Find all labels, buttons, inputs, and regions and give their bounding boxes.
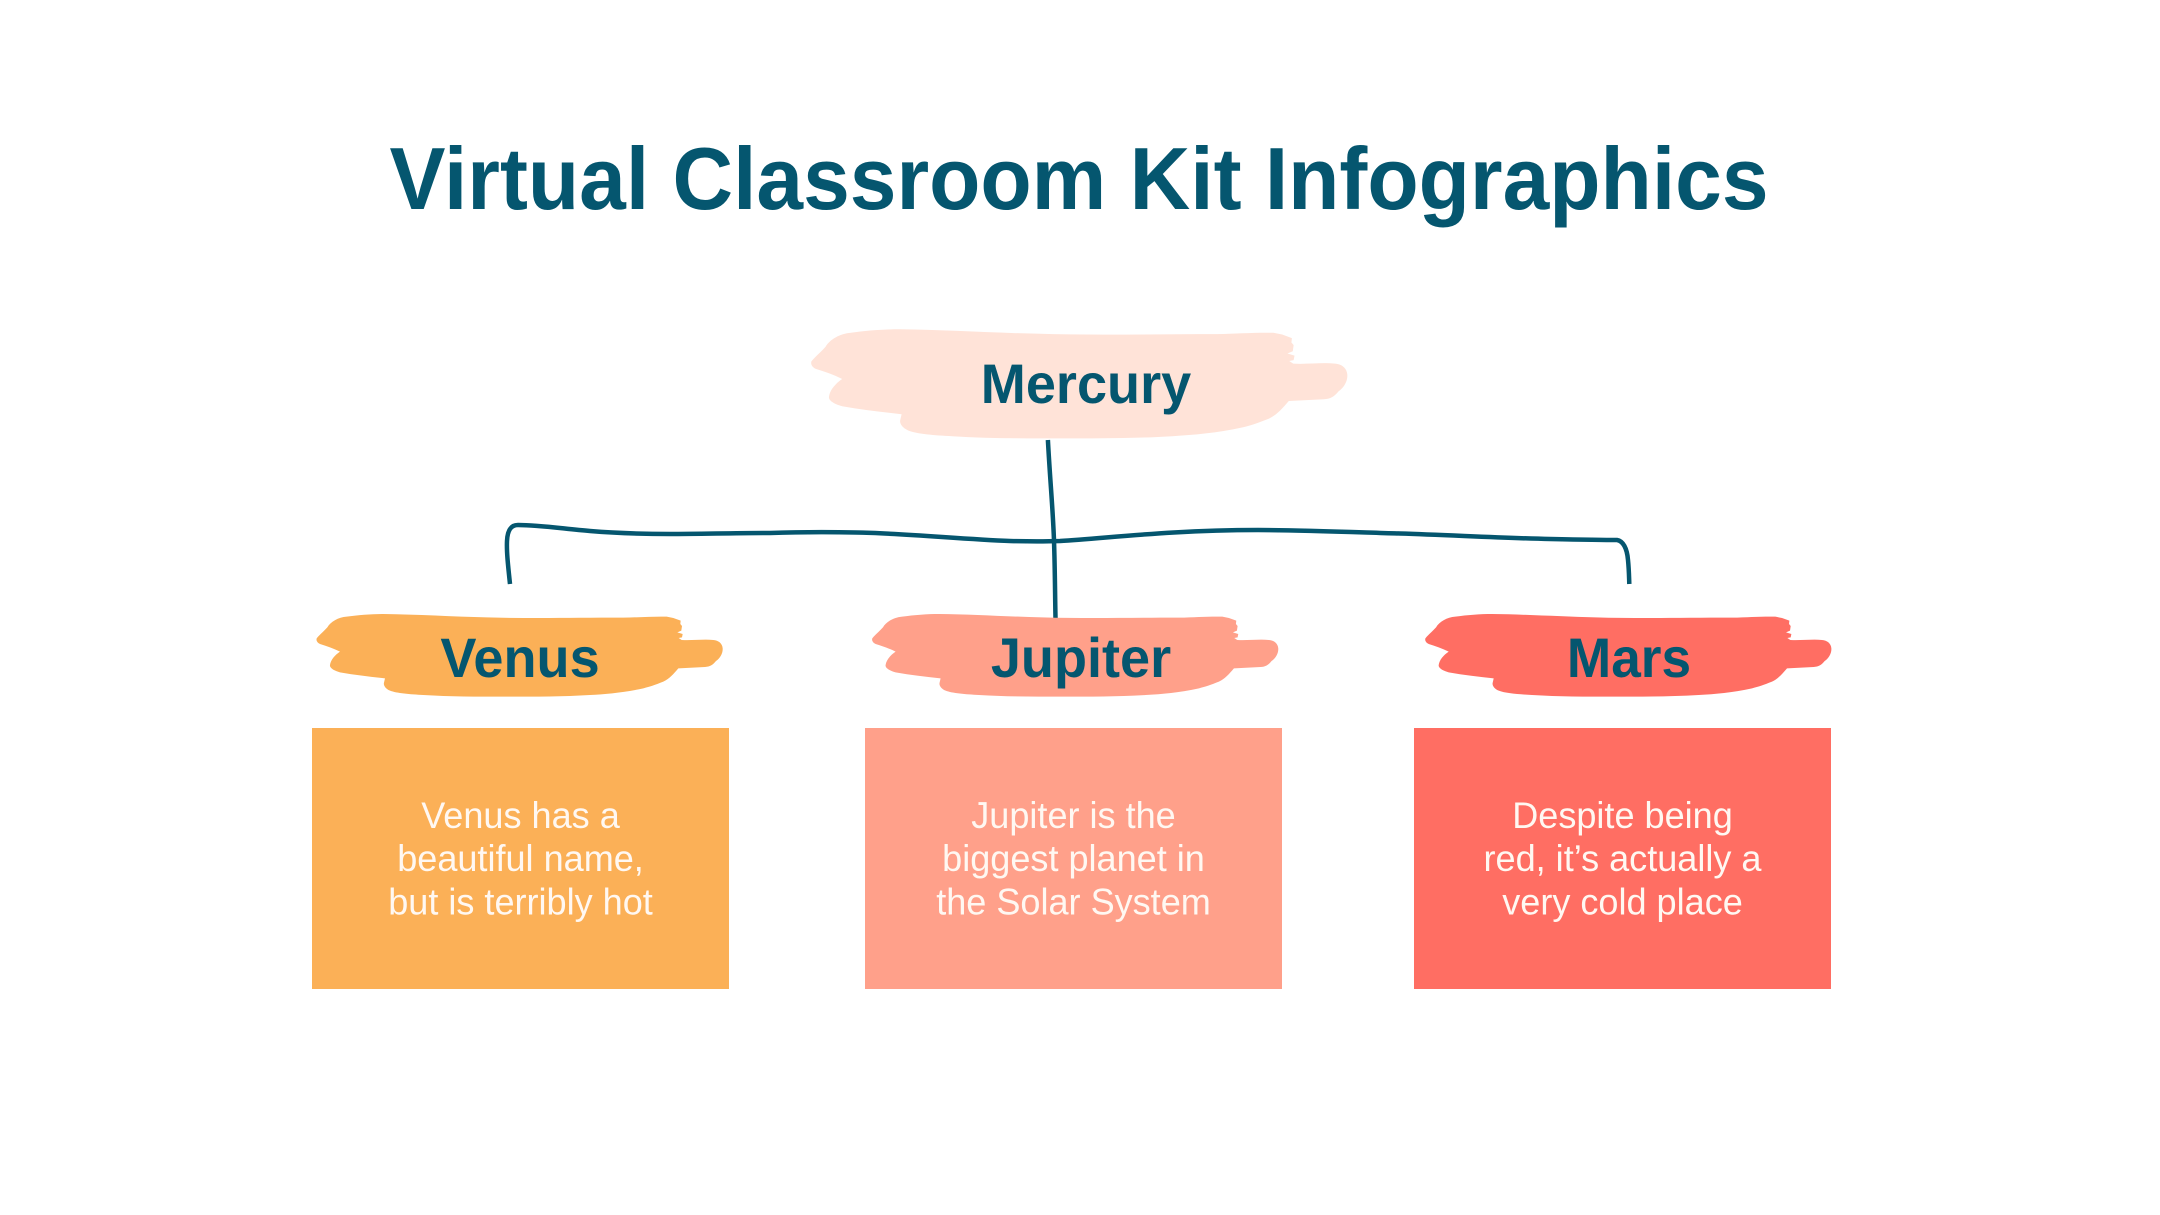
panel: Jupiter description xyxy=(865,728,1282,989)
brush stroke: Mercury xyxy=(811,329,1347,438)
node: Mercury xyxy=(811,329,1347,438)
panel: Venus description: but is terribly hot xyxy=(388,881,653,923)
title: Virtual Classroom Kit Infographics xyxy=(389,130,1769,228)
panel: Mars description: Despite being xyxy=(1512,795,1733,836)
brush stroke: Venus xyxy=(316,614,723,697)
brush stroke: Jupiter xyxy=(872,614,1278,697)
panel: Venus description: beautiful name, xyxy=(397,838,644,879)
panel: Jupiter description: the Solar System xyxy=(936,881,1211,923)
panel: Mars description: very cold place xyxy=(1502,881,1743,923)
panel: Jupiter description: biggest planet in xyxy=(942,838,1205,879)
panel: Mars description xyxy=(1414,728,1831,989)
panel: Mars description: red, it’s actually a xyxy=(1484,838,1762,879)
brush stroke: Mars xyxy=(1425,614,1831,697)
label: Mars: Mars xyxy=(1567,627,1691,689)
label: Venus: Venus xyxy=(440,626,600,689)
node: Venus xyxy=(316,614,723,697)
label: Mercury: Mercury xyxy=(981,352,1192,415)
panel: Venus description xyxy=(312,728,729,989)
panel: Jupiter description: Jupiter is the xyxy=(971,795,1176,836)
panel: Venus description: Venus has a xyxy=(421,795,620,836)
node: Jupiter xyxy=(872,614,1278,697)
label: Jupiter: Jupiter xyxy=(991,626,1171,689)
connector: tree lines from Mercury to the three planets xyxy=(507,440,1629,618)
node: Mars xyxy=(1425,614,1831,697)
